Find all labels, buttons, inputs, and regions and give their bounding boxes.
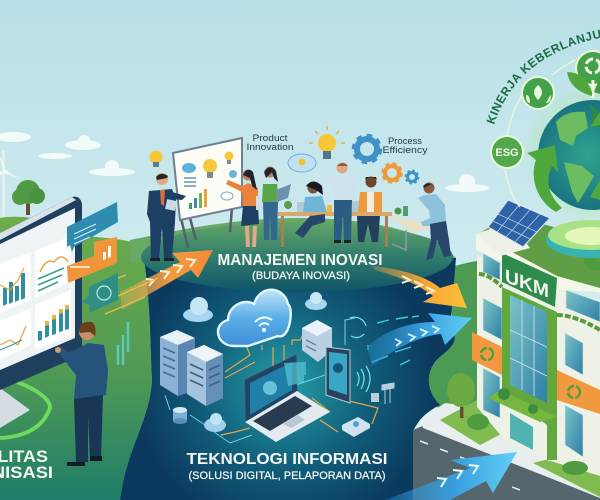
person: woman in orange (226, 170, 263, 247)
big lightbulb icon (309, 126, 345, 159)
heading: manajemen inovasi (218, 252, 382, 282)
heading: teknologi informasi: TEKNOLOGI INFORMASI (186, 451, 388, 468)
green swoosh ring (0, 382, 50, 438)
recycle badge (575, 50, 600, 86)
big cloud (218, 290, 291, 346)
chart card 4 (35, 290, 71, 350)
chat bubble teal (81, 273, 118, 313)
label: product innovation (246, 133, 294, 152)
right green land (428, 258, 490, 420)
cloud with bulb (288, 154, 316, 172)
small cloud right (305, 292, 327, 310)
side desk (392, 206, 432, 250)
building: UKM (467, 215, 600, 476)
person: standing man (322, 162, 355, 243)
chat bubble orange (67, 237, 117, 283)
heading: manajemen inovasi: MANAJEMEN INOVASI (218, 252, 382, 269)
ESG badge (490, 135, 524, 169)
circular arrows (527, 145, 562, 212)
ESG badge: ESG (495, 147, 519, 159)
yellow arrow to building (372, 266, 467, 308)
green tower frame and glass (502, 287, 557, 460)
planter box (488, 390, 557, 422)
road and sidewalk (413, 400, 600, 500)
UKM sign (502, 253, 557, 307)
door (510, 413, 533, 450)
label: process efficiency: Efficiency (382, 145, 428, 155)
platform: innovation management (141, 126, 453, 292)
server rack center (187, 345, 223, 406)
globe (538, 100, 600, 210)
roof green (478, 215, 600, 288)
pedestal (546, 220, 600, 258)
server rack right (302, 320, 332, 362)
person: seated woman (295, 182, 327, 238)
person: seated man in orange (357, 176, 382, 242)
wind turbine (0, 150, 20, 218)
windows (483, 253, 600, 457)
vine greenery (471, 274, 600, 330)
label: product innovation: Product (252, 133, 288, 143)
heading: teknologi informasi (186, 451, 388, 482)
orange panels with recycling mark (472, 332, 600, 414)
person: woman in green (262, 166, 291, 240)
table with laptops (278, 201, 392, 247)
person: man at right (418, 182, 451, 260)
person: viewer at monitor (55, 322, 108, 466)
orange arrow (105, 250, 213, 314)
chart card 3 (0, 308, 31, 360)
solar panel (476, 200, 550, 256)
gear icons (354, 136, 418, 184)
monitor panel: dashboards (0, 197, 82, 438)
small cloud left (183, 297, 213, 322)
arc title (494, 30, 600, 125)
tree on left (12, 180, 45, 215)
technology network (160, 290, 419, 443)
laptop (245, 355, 330, 442)
small sensors (371, 383, 394, 404)
roof slab (476, 234, 600, 293)
whiteboard (173, 138, 242, 248)
tree by building (447, 373, 475, 418)
label: process efficiency: Process (388, 136, 423, 146)
dark technology field (120, 258, 456, 500)
small cloud upload (204, 413, 226, 432)
database cylinder (173, 407, 187, 424)
monitor frame (0, 197, 82, 390)
sprout (567, 72, 600, 98)
server rack left (160, 330, 195, 396)
label: process efficiency (382, 136, 428, 155)
connector lines (221, 335, 378, 435)
chat bubble blue (67, 202, 118, 252)
signal dashes (118, 322, 128, 365)
clouds (0, 132, 489, 192)
sustainability globe group (486, 30, 600, 258)
orbit rings (505, 60, 575, 207)
monitor stand (0, 388, 30, 428)
bottom blue arrow (385, 452, 517, 500)
cyan dashes (372, 316, 419, 365)
monitor screen (0, 208, 75, 370)
heading: kapabilitas organisasi (0, 447, 53, 482)
UKM sign: UKM (505, 266, 549, 303)
leaf badge (521, 76, 555, 110)
building body (477, 255, 600, 476)
chart card 2 (35, 236, 71, 298)
chart card 1 (0, 252, 31, 313)
bulb icon left (150, 150, 162, 167)
smartphone (326, 347, 350, 403)
globe halo (523, 85, 600, 225)
back hills behind platform (130, 218, 456, 262)
blue arrow right (367, 313, 472, 366)
person: presenter (147, 173, 186, 261)
heading: manajemen inovasi: (BUDAYA INOVASI) (252, 270, 350, 282)
heading: teknologi informasi: (SOLUSI DIGITAL, PELAPORAN DATA) (188, 470, 386, 482)
bushes and planting (467, 250, 600, 475)
left green land (0, 217, 152, 500)
wifi waves (350, 317, 370, 392)
router device (342, 417, 370, 437)
label: product innovation: Innovation (246, 142, 294, 152)
